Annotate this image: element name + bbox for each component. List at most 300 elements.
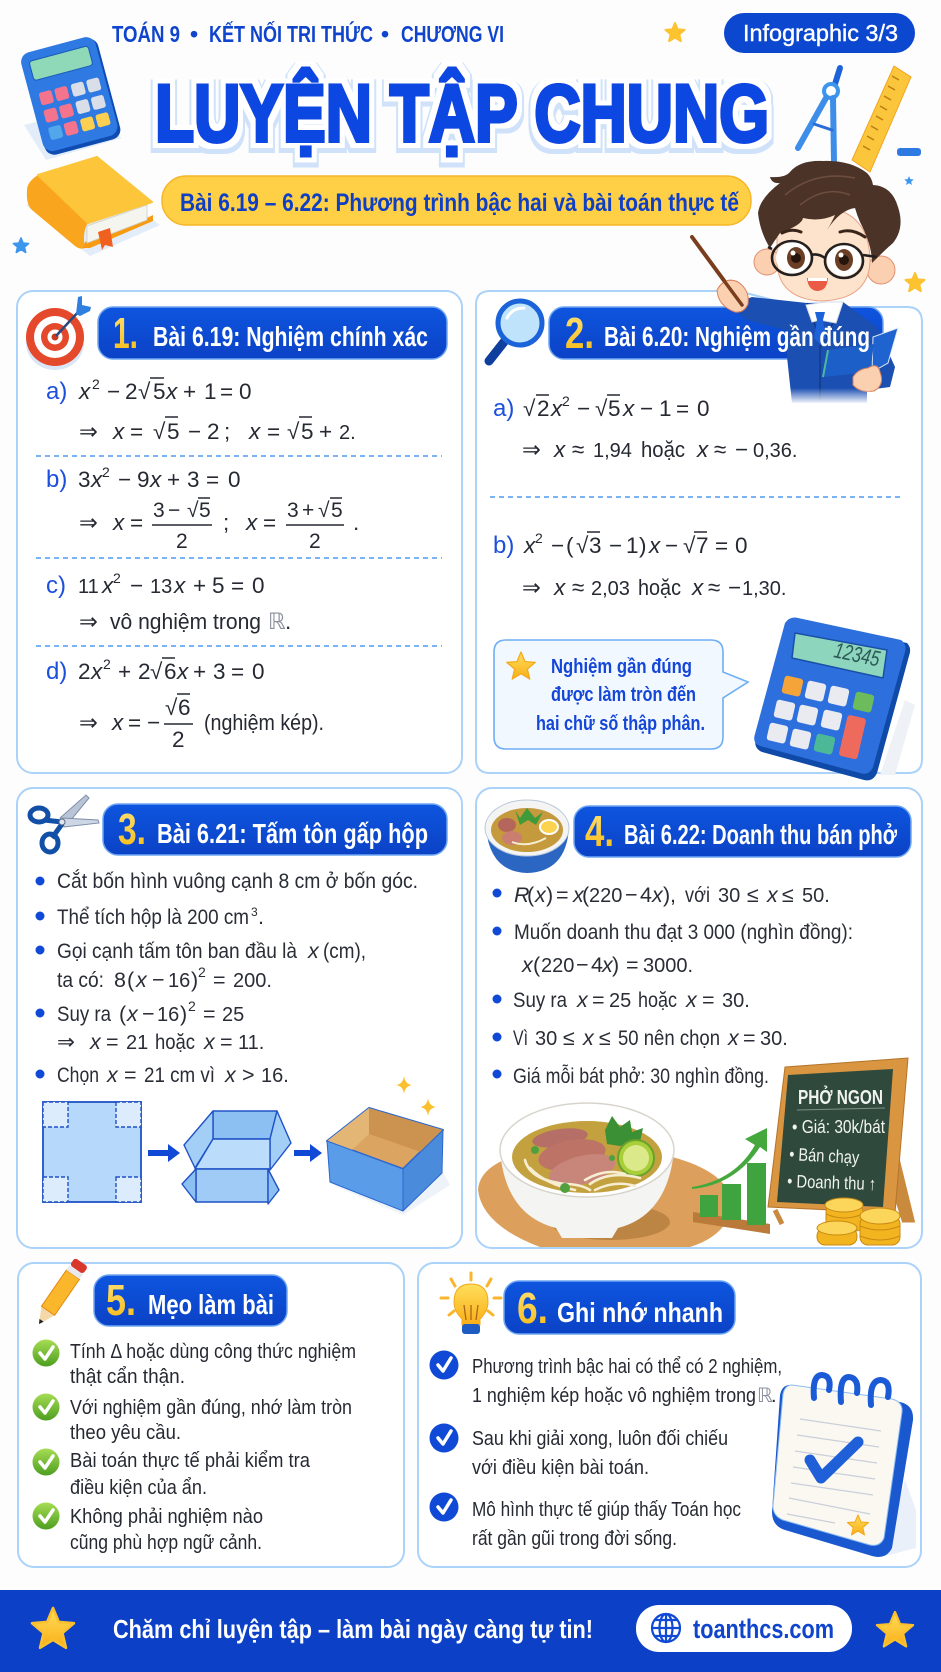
pointer tip over hand <box>722 278 742 305</box>
exercise b: b) <box>46 466 67 493</box>
exercise d: 2 <box>138 659 151 684</box>
arrow: fold to box <box>294 1144 322 1162</box>
exercise b <box>46 464 359 553</box>
heading pill <box>98 307 447 359</box>
exercise d: 0 <box>252 659 265 684</box>
bullet: revenue function: ≤ <box>747 883 759 907</box>
exercise a: − <box>640 396 653 421</box>
exercise a: x <box>165 379 178 404</box>
exercise b: b) <box>493 532 514 559</box>
icon: yellow book <box>26 157 160 256</box>
bullet: deduction: x <box>126 1002 139 1026</box>
bullet: solutions: x <box>576 988 589 1012</box>
exercise c: x <box>101 573 114 598</box>
heading pill <box>549 307 883 359</box>
icon: notebook with check <box>772 1375 916 1557</box>
bullet: deduction: 2 <box>188 998 196 1014</box>
exercise b: x <box>245 510 258 535</box>
hand with pointer <box>717 280 748 312</box>
exercise c: + <box>193 573 206 598</box>
note 1: 1 nghiệm kép hoặc vô nghiệm trong <box>472 1385 756 1407</box>
exercise b: 3 <box>589 533 602 558</box>
subtitle pill: Bài 6.19 – 6.22: Phương trình bậc hai và bài toán thực tế <box>180 189 739 217</box>
panel 5: Mẹo làm bài <box>18 1258 404 1567</box>
exercise b: x <box>553 575 566 600</box>
exercise b: 1,30. <box>742 578 786 600</box>
tip 1 <box>32 1340 356 1388</box>
website pill: toanthcs.com <box>693 1614 834 1644</box>
series line: TOÁN 9 <box>112 20 180 47</box>
bullet: deduction: x <box>89 1030 102 1054</box>
footer slogan: Chăm chỉ luyện tập – làm bài ngày càng tự tin! <box>113 1614 593 1644</box>
exercise b: 5 <box>199 499 211 522</box>
exercise a: ⇒ <box>522 437 541 462</box>
exercise a: x <box>553 437 566 462</box>
bullet: equation setup: 8 <box>114 968 126 992</box>
panel 3: Bài 6.21 <box>17 788 462 1248</box>
bullet: condition: Vì <box>513 1026 528 1050</box>
exercise a: √ <box>523 396 536 421</box>
exercise d: + <box>193 659 206 684</box>
exercise d: √ <box>165 695 178 720</box>
heading number: 4. <box>585 807 614 856</box>
panel frame <box>476 291 922 773</box>
exercise a: x <box>78 379 91 404</box>
bullet: target revenue: x <box>521 953 534 977</box>
exercise a: x <box>550 396 563 421</box>
illustration: pho bowl <box>500 1103 674 1240</box>
bullet: solutions: 30. <box>722 990 750 1012</box>
exercise b: x <box>149 467 162 492</box>
heading pill <box>103 804 447 855</box>
exercise a: = <box>220 379 233 404</box>
icon: pho bowl <box>485 800 569 873</box>
bullet: solutions: hoặc <box>638 988 677 1012</box>
exercise d: √ <box>150 659 163 684</box>
exercise a: − <box>188 419 201 444</box>
exercise a: x <box>112 419 125 444</box>
heading pill <box>504 1281 735 1334</box>
bullet: target revenue: 3000. <box>643 955 693 977</box>
exercise d <box>46 656 324 752</box>
header <box>13 13 925 291</box>
icon: compass <box>798 68 840 162</box>
exercise b: − <box>118 467 131 492</box>
bullet: equation setup: ta có: <box>57 968 104 992</box>
exercise a: x <box>622 396 635 421</box>
exercise b: x <box>523 533 536 558</box>
callout: rounding note: được làm tròn đến <box>551 684 696 706</box>
panel frame <box>418 1263 921 1567</box>
exercise c: 5 <box>212 573 225 598</box>
tip 2 <box>32 1394 352 1444</box>
exercise b: x <box>90 467 103 492</box>
exercise c: . <box>285 609 291 634</box>
exercise a: 0 <box>697 396 710 421</box>
series line: CHƯƠNG VI <box>401 21 504 47</box>
exercise b: hoặc <box>638 575 681 600</box>
exercise a: 0,36. <box>753 440 797 462</box>
exercise b: ≈ <box>708 575 720 600</box>
exercise a: = <box>267 419 280 444</box>
bullet: revenue function: x <box>766 883 779 907</box>
exercise a: ; <box>224 419 230 444</box>
panel frame <box>476 788 922 1248</box>
exercise a: √ <box>153 419 166 444</box>
bullet: deduction: x <box>203 1030 216 1054</box>
bullet: volume: Thể tích hộp là 200 cm <box>57 905 249 929</box>
bullet: equation setup: = <box>213 968 226 992</box>
heading text: Bài 6.19: Nghiệm chính xác <box>153 321 428 352</box>
exercise c: ⇒ <box>79 609 98 634</box>
icon: magnifying glass <box>489 301 542 361</box>
shirt and tie <box>806 302 843 344</box>
exercise b: 2,03 <box>591 578 630 600</box>
tip 2: Với nghiệm gần đúng, nhớ làm tròn <box>70 1397 352 1419</box>
callout: rounding note: Nghiệm gần đúng <box>551 656 692 678</box>
exercise a: − <box>735 437 748 462</box>
exercise b: 2 <box>176 530 188 553</box>
bullet: condition: ≤ <box>563 1026 575 1050</box>
exercise d: 3 <box>213 659 226 684</box>
note 3: rất gần gũi trong đời sống. <box>472 1528 677 1550</box>
bullet: solutions: = <box>702 988 715 1012</box>
exercise b: = <box>130 510 143 535</box>
bullet: revenue function: 30 <box>718 885 740 907</box>
note 3: Mô hình thực tế giúp thấy Toán học <box>472 1499 741 1521</box>
bullet: choose: = <box>124 1063 137 1087</box>
exercise b: 2 <box>309 530 321 553</box>
bullet: target revenue: x <box>601 953 614 977</box>
exercise d: 6 <box>178 695 191 720</box>
exercise b: x <box>648 533 661 558</box>
bullet: choose: 21 cm vì <box>144 1063 215 1087</box>
exercise c <box>46 570 291 634</box>
bullet: target revenue: 220 <box>541 955 574 977</box>
exercise a: a) <box>46 378 67 405</box>
bullet: equation setup: x <box>307 939 320 963</box>
heading number: 1. <box>113 309 138 358</box>
exercise d: + <box>118 659 131 684</box>
bullet: revenue function: − <box>625 883 638 907</box>
exercise b: 2 <box>102 464 110 480</box>
exercise b: √ <box>187 499 199 522</box>
exercise a: 2 <box>207 419 220 444</box>
exercise d: x <box>111 710 124 735</box>
exercise a: √ <box>595 396 608 421</box>
exercise b: − <box>609 533 622 558</box>
icon: blue dash <box>897 148 921 156</box>
heading text: Bài 6.21: Tấm tôn gấp hộp <box>157 818 428 849</box>
exercise a: x <box>696 437 709 462</box>
bullet: deduction: 11. <box>238 1032 264 1054</box>
exercise d: = <box>128 710 141 735</box>
tip 4 <box>32 1502 263 1554</box>
exercise a: 1 <box>659 396 672 421</box>
bullet: choose: > <box>242 1063 255 1087</box>
exercise a: ≈ <box>572 437 584 462</box>
illustration: chalkboard sign: • Giá: 30k/bát <box>792 1117 885 1137</box>
icon: footer star left <box>32 1608 74 1648</box>
exercise c: 11 <box>78 576 99 598</box>
bullet: deduction: ) <box>180 1002 187 1026</box>
illustration: growth chart <box>692 1128 770 1234</box>
bullet: cut squares: Cắt bốn hình vuông cạnh 8 cm ở bốn góc. <box>57 868 418 893</box>
exercise b: √ <box>318 499 330 522</box>
bullet: target revenue: ) <box>612 953 619 977</box>
exercise d: 6 <box>164 659 177 684</box>
panel 1: Bài 6.19 <box>17 291 462 773</box>
bullet: condition: x <box>727 1026 740 1050</box>
icon: scissors <box>30 795 99 852</box>
bullet: target revenue: − <box>576 953 589 977</box>
bullet: solutions: 25 <box>609 990 631 1012</box>
exercise b: √ <box>576 533 589 558</box>
heading pill <box>94 1275 287 1326</box>
illustration: wooden table <box>478 1150 732 1247</box>
bullet: solutions: x <box>685 988 698 1012</box>
bullet: target revenue <box>492 920 853 977</box>
tip 4: Không phải nghiệm nào <box>70 1506 263 1528</box>
bullet: revenue function: ≤ <box>782 883 794 907</box>
hand holding book <box>853 366 882 391</box>
bullet: revenue function: R <box>514 883 530 907</box>
icon: sparkles <box>396 1076 436 1116</box>
badge: infographic 3/3: Infographic 3/3 <box>743 20 898 46</box>
website pill <box>636 1605 852 1652</box>
exercise c: vô nghiệm trong <box>110 609 261 634</box>
bullet: deduction: ( <box>119 1002 127 1026</box>
icon: small yellow star <box>665 23 685 41</box>
exercise d: 2 <box>78 659 91 684</box>
exercise b: 3 <box>287 499 299 522</box>
badge: infographic 3/3 <box>724 13 915 53</box>
callout: rounding note: hai chữ số thập phân. <box>536 713 705 735</box>
exercise d: = <box>231 659 244 684</box>
bullet: deduction: = <box>106 1030 119 1054</box>
exercise a <box>46 376 356 444</box>
exercise a: = <box>676 396 689 421</box>
exercise b: . <box>353 510 359 535</box>
bullet: revenue function: 4 <box>640 883 652 907</box>
bullet: condition: 30. <box>760 1028 788 1050</box>
footer background <box>0 1590 941 1672</box>
bullet: deduction: ⇒ <box>57 1030 75 1054</box>
tip 2: theo yêu cầu. <box>70 1422 181 1444</box>
bullet: volume: 3 <box>251 905 258 919</box>
diagram: folding box <box>182 1111 291 1204</box>
fade at suit bottom <box>786 388 870 404</box>
note 2: với điều kiện bài toán. <box>472 1457 649 1479</box>
diagram: finished box <box>327 1108 450 1215</box>
series line: KẾT NỐI TRI THỨC <box>209 20 373 47</box>
exercise b: 9 <box>137 467 150 492</box>
exercise b: + <box>167 467 180 492</box>
ears <box>754 249 895 284</box>
bullet: choose: x <box>106 1063 119 1087</box>
bullet: revenue function: 220 <box>589 885 622 907</box>
bullet: revenue function: ), <box>663 883 676 907</box>
exercise b: ⇒ <box>522 575 541 600</box>
panel frame <box>17 291 462 773</box>
callout: rounding note <box>494 640 748 749</box>
exercise c: 2 <box>113 570 121 586</box>
note 1: ℝ <box>757 1385 773 1407</box>
bullet: deduction: hoặc <box>155 1030 195 1054</box>
footer banner <box>0 1590 941 1672</box>
exercise a: 1 <box>204 379 217 404</box>
bullet: equation setup: 2 <box>198 964 206 980</box>
exercise b: 0 <box>735 533 748 558</box>
illustration: gold coins <box>817 1198 900 1245</box>
bullet: equation setup: ( <box>127 968 135 992</box>
bullet: equation setup: − <box>152 968 165 992</box>
exercise b: = <box>206 467 219 492</box>
bullet: choose: 16. <box>261 1065 289 1087</box>
bullet: solutions: Suy ra <box>513 988 567 1012</box>
icon: light bulb <box>441 1273 501 1334</box>
note 1: Phương trình bậc hai có thể có 2 nghiệm, <box>472 1356 782 1378</box>
exercise d: ⇒ <box>79 710 98 735</box>
panel 2: Bài 6.20 <box>476 291 922 780</box>
exercise b: 1 <box>626 533 639 558</box>
exercise b: ⇒ <box>79 510 98 535</box>
illustration: chalkboard sign: PHỞ NGON <box>798 1085 883 1109</box>
tip 1: thật cẩn thận. <box>70 1366 185 1388</box>
exercise a: 0 <box>239 379 252 404</box>
heading text: Ghi nhớ nhanh <box>557 1297 723 1328</box>
tip 3: Bài toán thực tế phải kiểm tra <box>70 1450 311 1472</box>
icon: pencil <box>32 1258 88 1329</box>
series line: • <box>190 21 198 47</box>
tip 3: điều kiện của ẩn. <box>70 1477 207 1499</box>
icon: blue star right <box>904 176 914 185</box>
exercise b: − <box>168 499 180 522</box>
exercise c: 0 <box>252 573 265 598</box>
book <box>823 328 898 377</box>
tip 3 <box>32 1448 311 1499</box>
arrow: sheet to fold <box>148 1144 180 1162</box>
bullet: equation setup: ) <box>191 968 198 992</box>
exercise c: ℝ <box>268 609 286 634</box>
exercise b: 2 <box>535 530 543 546</box>
exercise d: (nghiệm kép). <box>204 710 324 735</box>
exercise b: − <box>551 533 564 558</box>
exercise b: = <box>715 533 728 558</box>
panel 4: Bài 6.22 <box>476 788 922 1248</box>
bullet: deduction: = <box>220 1030 233 1054</box>
bullet: deduction: 25 <box>222 1004 244 1026</box>
exercise b: √ <box>683 533 696 558</box>
exercise a: 5 <box>608 396 621 421</box>
exercise a: 5 <box>167 419 180 444</box>
exercise b: 5 <box>331 499 343 522</box>
exercise b: − <box>728 575 741 600</box>
bullet: equation setup: x <box>135 968 148 992</box>
panel frame <box>17 788 462 1248</box>
exercise b: ; <box>223 510 229 535</box>
bullet: condition: 30 <box>535 1028 557 1050</box>
bullet: target revenue: = <box>626 953 639 977</box>
bullet: deduction: 16 <box>157 1004 179 1026</box>
icon: yellow star right <box>905 273 925 291</box>
panel frame <box>18 1263 404 1567</box>
bullet: revenue function: với <box>685 883 710 907</box>
exercise a: − <box>107 379 120 404</box>
bullet: revenue function: ) <box>546 883 553 907</box>
bullet: deduction <box>36 998 264 1054</box>
hair highlights <box>785 176 855 205</box>
exercise a: = <box>130 419 143 444</box>
exercise b: 0 <box>228 467 241 492</box>
exercise d: x <box>176 659 189 684</box>
boy teacher character <box>604 161 901 404</box>
bullet: condition: 50 nên chọn <box>618 1026 720 1050</box>
exercise a: − <box>577 396 590 421</box>
exercise b: 3 <box>78 467 91 492</box>
bullet: equation setup <box>36 939 366 992</box>
exercise c: 13 <box>150 576 172 598</box>
exercise b: ) <box>639 533 646 558</box>
exercise a: 2 <box>562 393 570 409</box>
illustration: chalkboard sign: • Doanh thu ↑ <box>787 1171 877 1194</box>
exercise c: c) <box>46 572 66 599</box>
exercise b: x <box>112 510 125 535</box>
exercise a: a) <box>493 395 514 422</box>
pointer stick <box>692 237 742 305</box>
bullet: revenue function: ( <box>527 883 535 907</box>
note 1 <box>430 1350 782 1407</box>
exercise a: 2 <box>92 376 100 392</box>
bullet: choose: Chọn <box>57 1063 99 1087</box>
exercise b: 3 <box>187 467 200 492</box>
bullet: condition <box>492 1026 788 1050</box>
note 2 <box>430 1424 728 1479</box>
exercise a: x <box>248 419 261 444</box>
illustration: chalkboard sign: • Bán chạy <box>789 1144 860 1168</box>
icon: target with dart <box>26 296 91 370</box>
bullet: revenue function: = <box>556 883 569 907</box>
exercise c: x <box>173 573 186 598</box>
bullet: target revenue: ( <box>533 953 541 977</box>
exercise a: 2. <box>339 422 356 444</box>
bullet: condition: = <box>743 1026 756 1050</box>
suit lapels <box>807 302 843 400</box>
diagram: flat sheet with corners <box>43 1102 141 1202</box>
hair <box>758 161 901 263</box>
bullet: revenue function: x <box>651 883 664 907</box>
exercise d: d) <box>46 658 67 685</box>
bullet: deduction: 21 <box>126 1032 148 1054</box>
exercise b: = <box>263 510 276 535</box>
bullet: target revenue: Muốn doanh thu đạt 3 000 (nghìn đồng): <box>514 920 853 944</box>
bullet: solutions <box>492 988 750 1012</box>
exercise d: − <box>147 710 160 735</box>
bullet: revenue function: x <box>572 883 585 907</box>
bullet: revenue function <box>492 883 830 907</box>
exercise a: + <box>183 379 196 404</box>
icon: calculator: 12345 <box>832 637 883 672</box>
exercise b <box>493 530 786 600</box>
icon: footer star right <box>877 1612 913 1646</box>
illustration: chalkboard sign <box>768 1058 912 1224</box>
icon: blue star left <box>13 238 29 252</box>
panel 6: Ghi nhớ nhanh <box>418 1263 921 1567</box>
suit <box>728 297 895 403</box>
exercise a: 5 <box>153 379 166 404</box>
tip 1: Tính Δ hoặc dùng công thức nghiệm <box>70 1341 356 1363</box>
exercise b: − <box>665 533 678 558</box>
